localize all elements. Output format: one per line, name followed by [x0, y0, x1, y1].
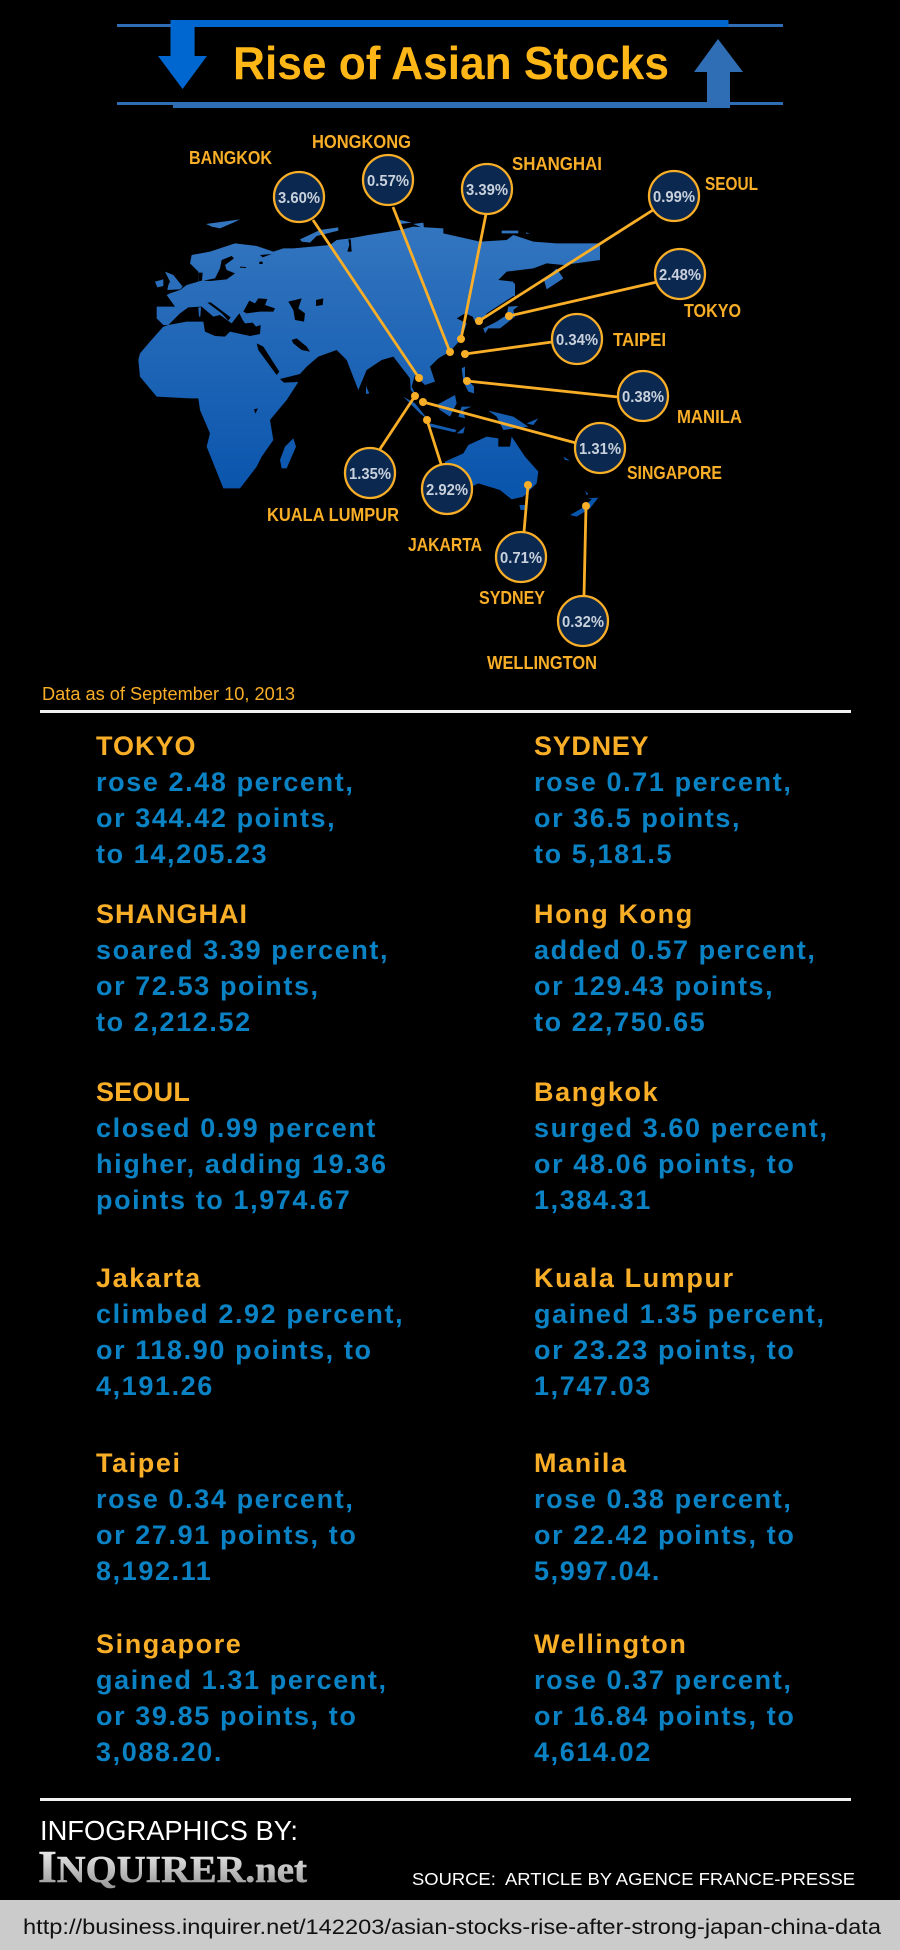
text block: Shanghai: or 72.53 points,: [96, 971, 320, 1001]
callout: Jakarta: 2.92%: [426, 482, 468, 499]
text block: Seoul: points to 1,974.67: [96, 1185, 351, 1215]
callout connector lines: [313, 207, 657, 596]
text block: Bangkok: [534, 1077, 829, 1215]
text block: Wellington: or 16.84 points, to: [534, 1701, 795, 1731]
callout: Bangkok: 3.60%: [278, 190, 320, 207]
text block: Bangkok: 1,384.31: [534, 1185, 652, 1215]
text block: Kuala Lumpur: gained 1.35 percent,: [534, 1299, 826, 1329]
callout: Singapore: SINGAPORE: [627, 463, 722, 483]
text block: Hong Kong: or 129.43 points,: [534, 971, 774, 1001]
text block: Taipei: or 27.91 points, to: [96, 1520, 357, 1550]
text block: Tokyo: [96, 731, 354, 869]
text block: Singapore: [96, 1629, 388, 1767]
text block: Manila: Manila: [534, 1448, 628, 1478]
text block: Wellington: 4,614.02: [534, 1737, 652, 1767]
callout: Bangkok: BANGKOK: [189, 148, 272, 168]
callout: Kuala Lumpur: KUALA LUMPUR: [267, 505, 399, 525]
Kamchatka, Japan, Sakhalin: [544, 268, 563, 289]
text block: Sydney: SYDNEY: [534, 731, 649, 761]
Australia, Tasmania, New Zealand, Fiji: [445, 437, 538, 499]
text block: Seoul: SEOUL: [96, 1077, 190, 1107]
callout: Shanghai: 3.39%: [466, 182, 508, 199]
date note: Data as of September 10, 2013: [42, 684, 295, 704]
text block: Seoul: closed 0.99 percent: [96, 1113, 377, 1143]
callout: Jakarta: JAKARTA: [408, 535, 482, 555]
text block: Seoul: [96, 1077, 388, 1215]
text block: Taipei: rose 0.34 percent,: [96, 1484, 354, 1514]
text block: Seoul: higher, adding 19.36: [96, 1149, 388, 1179]
callout: Tokyo: 2.48%: [659, 267, 701, 284]
text block: Jakarta: Jakarta: [96, 1263, 202, 1293]
logo: Inquirer.net: INQUIRER.net: [38, 1841, 308, 1892]
callout: Manila: [618, 371, 742, 427]
text block: Shanghai: to 2,212.52: [96, 1007, 252, 1037]
icon: up arrow: [173, 39, 743, 108]
callout: Seoul: [649, 171, 758, 221]
text block: Taipei: Taipei: [96, 1448, 182, 1478]
text block: Shanghai: soared 3.39 percent,: [96, 935, 389, 965]
text block: Jakarta: [96, 1263, 404, 1401]
text block: Hong Kong: added 0.57 percent,: [534, 935, 816, 965]
callout: Sydney: SYDNEY: [479, 588, 545, 608]
Southeast Asia islands: [462, 367, 474, 393]
text block: Sydney: rose 0.71 percent,: [534, 767, 792, 797]
text block: Tokyo: to 14,205.23: [96, 839, 268, 869]
callout: Jakarta: [408, 464, 482, 555]
text block: Taipei: 8,192.11: [96, 1556, 212, 1586]
callout: Seoul: 0.99%: [653, 189, 695, 206]
text block: Manila: 5,997.04.: [534, 1556, 661, 1586]
text block: Taipei: [96, 1448, 357, 1586]
text block: Manila: [534, 1448, 795, 1586]
text block: Singapore: or 39.85 points, to: [96, 1701, 357, 1731]
callout: Singapore: 1.31%: [579, 441, 621, 458]
callout: Shanghai: [462, 154, 602, 214]
text block: Sydney: or 36.5 points,: [534, 803, 741, 833]
callout: Wellington: WELLINGTON: [487, 653, 597, 673]
callout: Manila: 0.38%: [622, 389, 664, 406]
text block: Shanghai: SHANGHAI: [96, 899, 248, 929]
callout: Bangkok: [189, 148, 324, 222]
Sardinia: [198, 307, 201, 317]
callout: Taipei: TAIPEI: [613, 330, 666, 350]
callout: Wellington: 0.32%: [562, 614, 604, 631]
source URL band: [0, 1900, 900, 1950]
title banner: [117, 20, 783, 108]
callout: Manila: MANILA: [677, 407, 742, 427]
callout: Sydney: [479, 532, 546, 608]
text block: Kuala Lumpur: Kuala Lumpur: [534, 1263, 735, 1293]
Madagascar and Sri Lanka: [280, 438, 296, 468]
callout: Hongkong: 0.57%: [367, 173, 409, 190]
text block: Bangkok: surged 3.60 percent,: [534, 1113, 829, 1143]
callout: Tokyo: [655, 249, 741, 321]
text block: Sydney: to 5,181.5: [534, 839, 673, 869]
callout: Sydney: 0.71%: [500, 550, 542, 567]
callout: Hongkong: HONGKONG: [312, 132, 411, 152]
text block: Bangkok: Bangkok: [534, 1077, 659, 1107]
text block: Sydney: [534, 731, 792, 869]
callout: Seoul: SEOUL: [705, 174, 758, 194]
credit: infographics by: INFOGRAPHICS BY:: [40, 1815, 298, 1846]
text block: Hong Kong: [534, 899, 816, 1037]
source: SOURCE: ARTICLE BY AGENCE FRANCE-PRESSE: [412, 1869, 855, 1889]
text block: Tokyo: TOKYO: [96, 731, 197, 761]
callout: Hongkong: [312, 132, 413, 205]
callout: Shanghai: SHANGHAI: [512, 154, 602, 174]
callout: Wellington: [487, 596, 608, 673]
text block: Tokyo: rose 2.48 percent,: [96, 767, 354, 797]
text block: Manila: rose 0.38 percent,: [534, 1484, 792, 1514]
text block: Kuala Lumpur: 1,747.03: [534, 1371, 652, 1401]
title: Rise of Asian Stocks: [233, 37, 669, 89]
text block: Hong Kong: Hong Kong: [534, 899, 694, 929]
text block: Tokyo: or 344.42 points,: [96, 803, 336, 833]
text block: Singapore: Singapore: [96, 1629, 242, 1659]
text block: Jakarta: 4,191.26: [96, 1371, 214, 1401]
world map: [138, 219, 600, 517]
text block: Bangkok: or 48.06 points, to: [534, 1149, 795, 1179]
text block: Wellington: rose 0.37 percent,: [534, 1665, 792, 1695]
text block: Jakarta: or 118.90 points, to: [96, 1335, 373, 1365]
text block: Wellington: [534, 1629, 795, 1767]
text block: Shanghai: [96, 899, 389, 1037]
seas (black cut-outs): [168, 239, 352, 414]
callout: Kuala Lumpur: [267, 448, 399, 525]
source URL band: http://business.inquirer.net/142203/asian-stocks-rise-after-strong-japan-china-data: [23, 1915, 881, 1939]
callout: Tokyo: TOKYO: [684, 301, 741, 321]
text block: Singapore: gained 1.31 percent,: [96, 1665, 388, 1695]
callout: Taipei: [552, 314, 666, 364]
text block: Jakarta: climbed 2.92 percent,: [96, 1299, 404, 1329]
text block: Kuala Lumpur: or 23.23 points, to: [534, 1335, 795, 1365]
text block: Kuala Lumpur: [534, 1263, 826, 1401]
icon: down arrow: [158, 20, 728, 89]
callout: Kuala Lumpur: 1.35%: [349, 466, 391, 483]
text block: Wellington: Wellington: [534, 1629, 687, 1659]
text block: Singapore: 3,088.20.: [96, 1737, 223, 1767]
text block: Hong Kong: to 22,750.65: [534, 1007, 706, 1037]
callout: Singapore: [575, 423, 722, 483]
northern and Atlantic islands: [206, 219, 240, 228]
text block: Manila: or 22.42 points, to: [534, 1520, 795, 1550]
callout: Taipei: 0.34%: [556, 332, 598, 349]
